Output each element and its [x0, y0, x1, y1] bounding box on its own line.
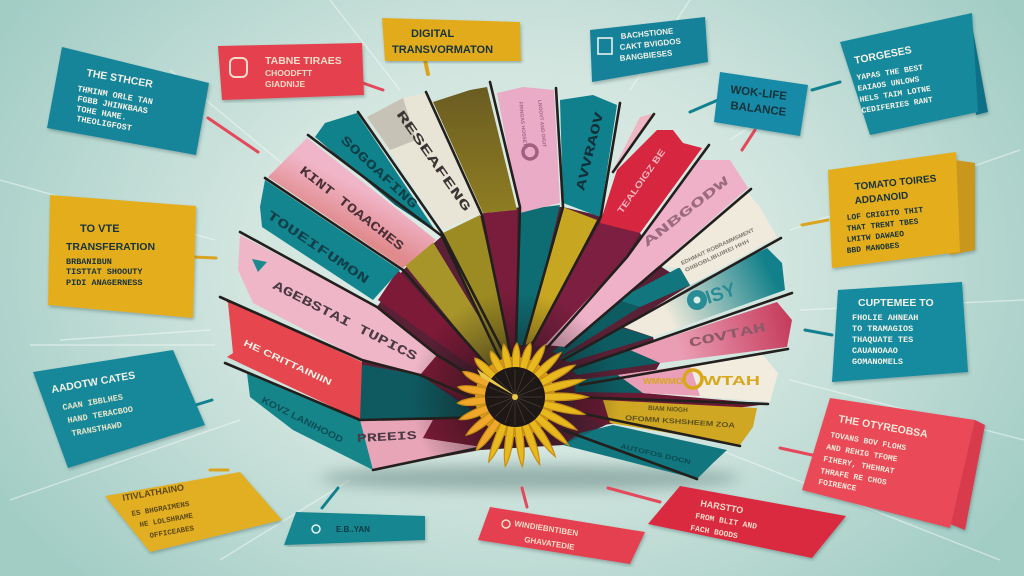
panel: yellow bottom left: HE LOLSHRAME — [139, 513, 194, 530]
outer blade: pale pink Anbgodw — [545, 160, 748, 347]
panel: adaptive cares teal: AADOTW CATES — [50, 369, 136, 396]
outer blade: pink-red Covtah: COVTAH — [688, 320, 767, 351]
panel: the stacher teal: THE STHCER — [85, 67, 154, 91]
panel: adaptive cares teal: TRANSTHAWD — [71, 420, 123, 439]
central paper fan — [220, 82, 792, 479]
panel: teal bottom tag: E.B..YAN — [336, 525, 370, 534]
outer blade: bottom teal: KOVZ LANIHOOD — [260, 395, 345, 445]
panel: teal top banner: BACHSTIONE — [620, 26, 674, 41]
panel: digital transformation: TRANSVORMATON — [392, 44, 493, 56]
panel: yellow right: THAT TRENT TBES — [846, 217, 919, 234]
panel: yellow right: TOMATO TOIRES — [854, 173, 937, 193]
panel: cupremes teal: CUPTEMEE TO — [858, 297, 934, 309]
connector strokes — [173, 60, 840, 508]
fan spines — [220, 82, 792, 479]
outer blade: teal Sogoafing — [315, 113, 437, 233]
outer blade: pink with topic text — [268, 138, 436, 268]
outer blade: yellow — [603, 400, 757, 445]
panel: teal top banner — [590, 17, 708, 82]
panel: torgeses teal: CEDIFERIES RANT — [861, 96, 934, 116]
panel: yellow right — [828, 152, 975, 268]
outer blade: pink with topic text: KINT TOAACHES — [297, 163, 407, 254]
panel: yellow bottom left: ES BHGRAIMENS — [131, 501, 191, 519]
panel: cupremes teal: GOMANOMELS — [852, 357, 903, 367]
panel: the otreegsa red: FOIRENCE — [817, 478, 857, 494]
panel: work-life balance: WOK-LIFE — [730, 84, 788, 103]
outer blade: cream-pink with yellow text: WTAH — [703, 373, 760, 388]
panel: cupremes teal: FHOLIE AHNEAH — [852, 313, 918, 323]
inner fan sections — [353, 205, 768, 470]
panel: the otreegsa red: AND REHIG TFOME — [825, 443, 898, 464]
panel: red bottom right: FACH BOODS — [689, 524, 739, 541]
panel: yellow right: ADDANOID — [854, 190, 909, 207]
panel: cupremes teal: THAQUATE TES — [852, 335, 913, 345]
panel: yellow right: LOF CRIGITO THIT — [846, 206, 924, 223]
panel: adaptive cares teal — [33, 350, 205, 468]
panel: red table titles — [218, 43, 364, 100]
outer blade: yellow: BIAM NIOGH — [648, 405, 688, 414]
panel: torgeses teal: YAPAS THE BEST — [856, 64, 924, 83]
outer blade: red — [222, 297, 362, 420]
outer blade: cream small text — [660, 193, 777, 285]
panel: yellow right: BBD MANOBES — [846, 241, 900, 256]
panel: digital transformation: DIGITAL — [411, 28, 454, 40]
panel: red bottom right — [648, 486, 846, 558]
outer blade: pink-red Covtah — [630, 302, 792, 363]
panel: red bottom right: HARSTTO — [700, 498, 744, 515]
panel: yellow left transformation: TRANSFERATION — [66, 241, 155, 253]
outer blade: olive — [433, 87, 517, 213]
panel: red table titles: GIADNIJE — [265, 79, 305, 89]
outer blade: bottom teal — [225, 363, 417, 470]
outer blade: pale pink sliver — [613, 113, 655, 170]
outer blade: cream small text: GIIBOBLIBUIREI HHH — [684, 239, 750, 274]
panel: yellow left transformation: PIDI ANAGERNESS — [66, 278, 143, 288]
panel: cupremes teal: TO TRAMAGIOS — [852, 324, 913, 334]
outer blade: bottom teal: PREEIS — [356, 429, 417, 446]
panel: red bottom right: FROM BLIT AND — [694, 512, 758, 532]
panel: red table titles: CHOODFTT — [265, 68, 313, 78]
panel: the otreegsa red: TOVANS BOV FLOHS — [829, 431, 907, 453]
outer blade: pale pink Anbgodw: ANBGODW — [640, 173, 733, 250]
outer blade: teal Avvraov — [560, 95, 617, 217]
panel: work-life balance: BALANCE — [730, 100, 787, 119]
outer blade: pink with icon — [497, 87, 560, 213]
outer blade: cream small text: EDHMAIT ROBRAMMSMENT — [680, 227, 756, 267]
outer blade: lower teal — [563, 425, 727, 479]
dark hub shading — [358, 207, 690, 470]
panel: the stacher teal: THEOLIGFOST — [75, 114, 132, 134]
panel: teal bottom tag — [284, 512, 425, 545]
panel: yellow left transformation: TISTTAT SHOOUTY — [66, 267, 143, 277]
panel: teal top banner: CAKT BVIGDOS — [619, 37, 682, 52]
panel: torgeses teal — [840, 13, 988, 135]
panel: yellow bottom left — [105, 472, 282, 552]
panel: teal top banner: BANGBIESES — [619, 48, 673, 63]
panel: red bottom centre — [478, 507, 645, 564]
panel: adaptive cares teal: CAAN IBBLHES — [62, 392, 124, 413]
panel: red bottom centre: WINDIEBNTIBEN — [514, 519, 579, 538]
rosette hub — [457, 342, 588, 467]
outer blade: pink with icon: FIRNGAS HOSSETS — [517, 102, 528, 150]
outer blade: pink with Agebstai Tupics: AGEBSTAI TUPICS — [270, 278, 420, 364]
panel: yellow left transformation: TO VTE — [80, 223, 120, 235]
outer blade: cream-pink with yellow text — [618, 355, 778, 402]
outer blade: teal with Toueifumon — [260, 180, 400, 300]
panel: red table titles: TABNE TIRAES — [265, 55, 342, 67]
outer blade: red — [600, 130, 702, 233]
panel: work-life balance — [714, 72, 808, 136]
outer blade: cream Reseafeng: RESEAFENG — [393, 108, 474, 215]
outer blade: red: TEALOIGZ BE — [615, 147, 667, 215]
outer blade: teal to cream Oisy — [623, 248, 785, 337]
outer blade: teal with Toueifumon: TOUEIFUMON — [264, 208, 372, 287]
outer blade: teal Avvraov: AVVRAOV — [573, 110, 607, 192]
panel: the otreegsa red: THRAFE RE CHOS — [819, 467, 887, 488]
panel: torgeses teal: HELS TAIM LOTNE — [859, 85, 932, 105]
panel: torgeses teal: TORGESES — [853, 44, 913, 67]
panel: the stacher teal: THMINM ORLE TAN — [76, 84, 154, 107]
panel: yellow left transformation — [48, 195, 196, 318]
panel: the otreegsa red: THE OTYREOBSA — [837, 413, 929, 441]
panel: the otreegsa red: FIHERY, THEHRAT — [822, 455, 895, 476]
panel: yellow bottom left: OFFICEABES — [149, 525, 195, 541]
panel: adaptive cares teal: HAND TERACBOO — [67, 405, 134, 426]
panel: the stacher teal — [47, 47, 209, 155]
inner fan base — [358, 207, 690, 470]
panel: digital transformation — [382, 18, 521, 61]
outer blade: red: HE CRITTAINIIN — [242, 338, 333, 387]
panel: yellow right: LMITW DAWAEO — [846, 230, 905, 245]
panel: the stacher teal: FGBB JHINKBAAS — [76, 94, 149, 116]
outer blade: teal Sogoafing: SOGOAFING — [337, 133, 421, 212]
panel: yellow bottom left: ITIVLATHAINO — [122, 482, 185, 503]
fan ground shadow — [320, 465, 740, 491]
panel: torgeses teal: EAIAOS UNLOWS — [857, 75, 920, 94]
panel: red bottom centre: GHAVATEDIE — [524, 535, 576, 552]
outer blade: pink with Agebstai Tupics — [238, 235, 437, 375]
outer blade: yellow: OFOMM KSHSHEEM ZOA — [625, 415, 735, 430]
outer blade: pink with icon: LNOOVT AND DIGIT — [536, 100, 547, 148]
outer blade: teal to cream Oisy: ISY — [703, 279, 739, 309]
outer blade: cream Reseafeng — [367, 93, 482, 230]
panel: cupremes teal — [832, 282, 968, 382]
outer blade: lower teal: AUTOFOS DOCN — [620, 443, 692, 466]
panel: the stacher teal: TOHE HAME. — [75, 104, 127, 123]
panel: cupremes teal: CAUANOAAO — [852, 346, 898, 356]
panel: the otreegsa red — [802, 398, 985, 530]
outer blade: cream-pink with yellow text: WMWMO — [643, 377, 683, 386]
panel: yellow left transformation: BRBANIBUN — [66, 257, 112, 267]
